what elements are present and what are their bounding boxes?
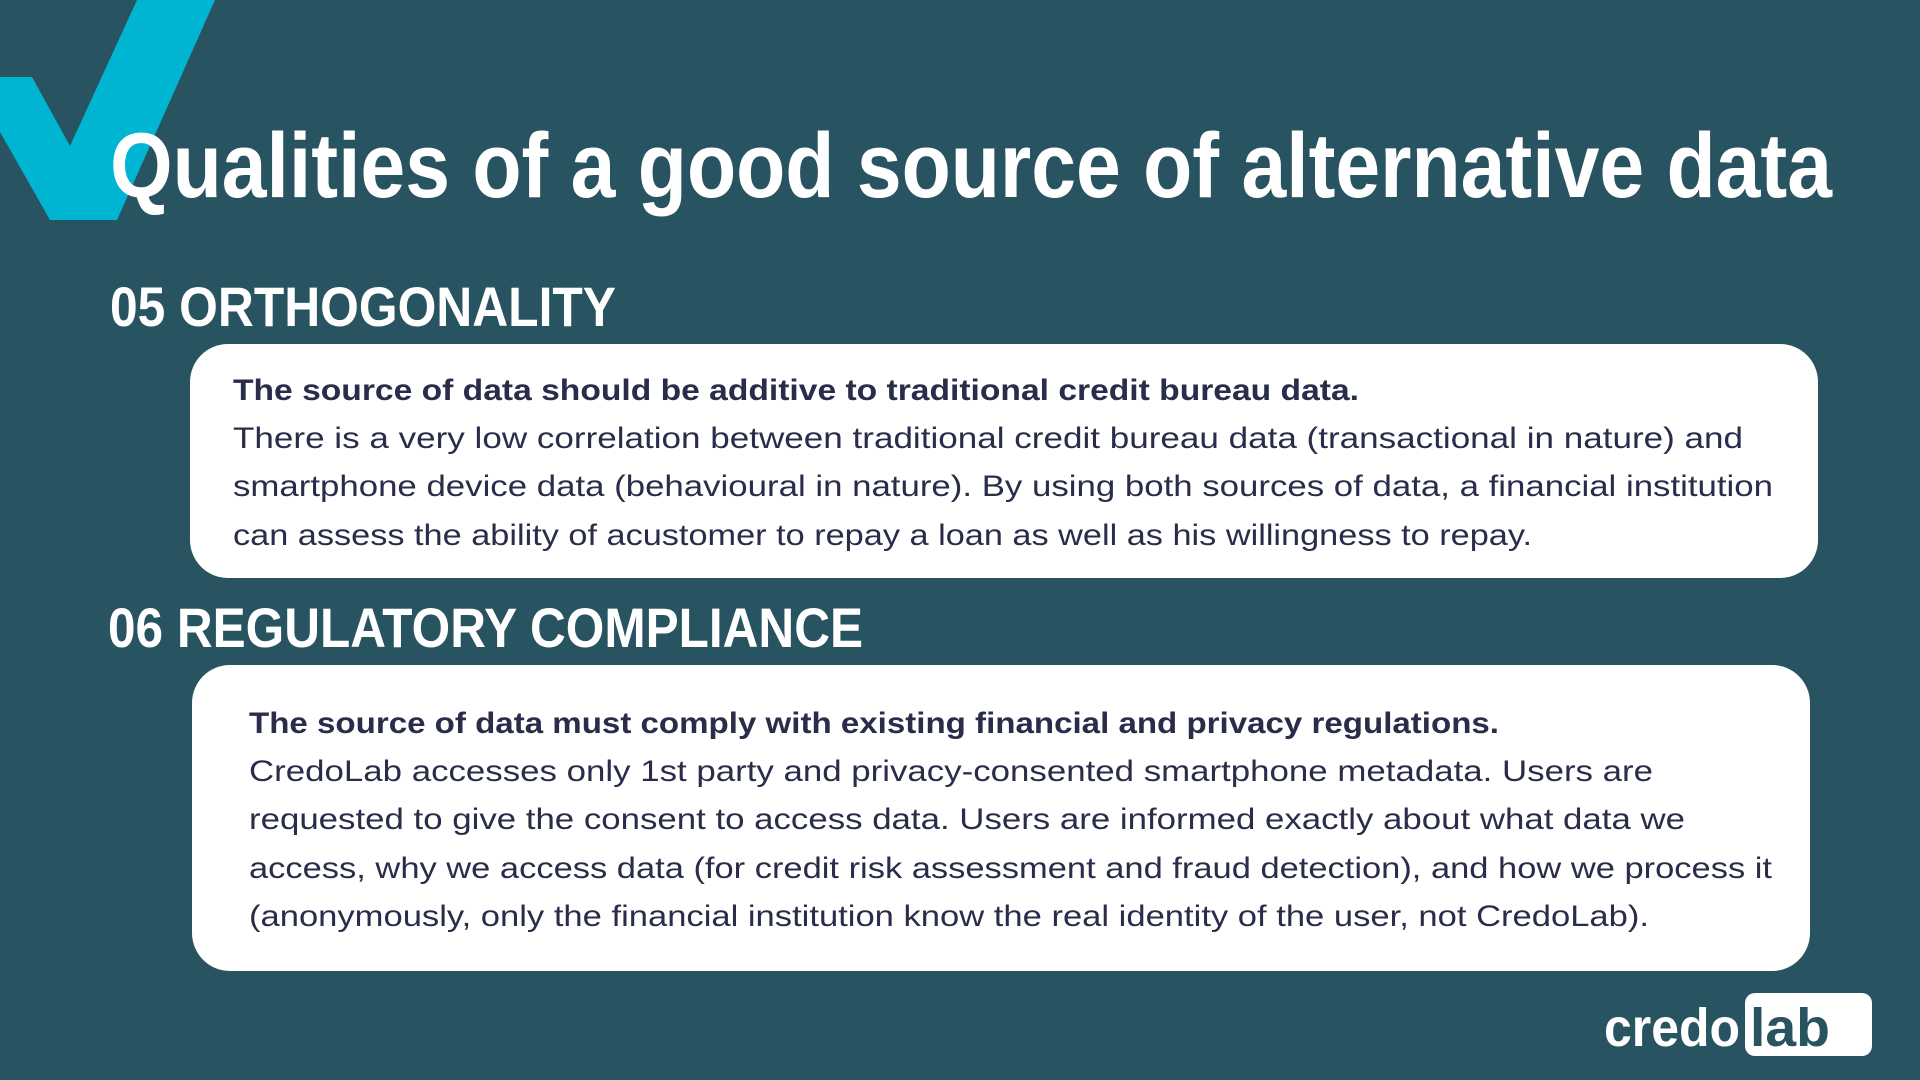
- icon: checkmark: [0, 0, 215, 220]
- heading: 05 orthogonality: 05 ORTHOGONALITY: [110, 275, 616, 338]
- text: orthogonality: There is a very low correlation between traditional credit bureau data (transactional in nature) and: [233, 422, 1743, 455]
- text: orthogonality: smartphone device data (behavioural in nature). By using both sources of data, a financial institution: [233, 470, 1773, 503]
- text: regulatory compliance: access, why we access data (for credit risk assessment and fraud detection), and how we process it: [249, 852, 1773, 885]
- logo: credolab: lab: [1750, 998, 1830, 1058]
- panel: orthogonality: [190, 344, 1818, 578]
- logo: credolab: credo: [1604, 998, 1740, 1058]
- logo: credolab: [1604, 993, 1872, 1058]
- text: orthogonality: The source of data should be additive to traditional credit bureau data.: [233, 374, 1359, 407]
- text: regulatory compliance: [249, 707, 1773, 933]
- text: orthogonality: [233, 374, 1773, 552]
- text: orthogonality: can assess the ability of acustomer to repay a loan as well as his willingness to repay.: [233, 519, 1532, 552]
- heading: 06 regulatory compliance: 06 REGULATORY COMPLIANCE: [108, 596, 863, 659]
- text: regulatory compliance: requested to give the consent to access data. Users are informed exactly about what data we: [249, 803, 1685, 836]
- text: regulatory compliance: CredoLab accesses only 1st party and privacy-consented smartphone metadata. Users are: [249, 755, 1653, 788]
- text: regulatory compliance: (anonymously, only the financial institution know the real identity of the user, not CredoLab).: [249, 900, 1649, 933]
- panel: regulatory compliance: [192, 665, 1810, 971]
- text: regulatory compliance: The source of data must comply with existing financial and privacy regulations.: [249, 707, 1499, 740]
